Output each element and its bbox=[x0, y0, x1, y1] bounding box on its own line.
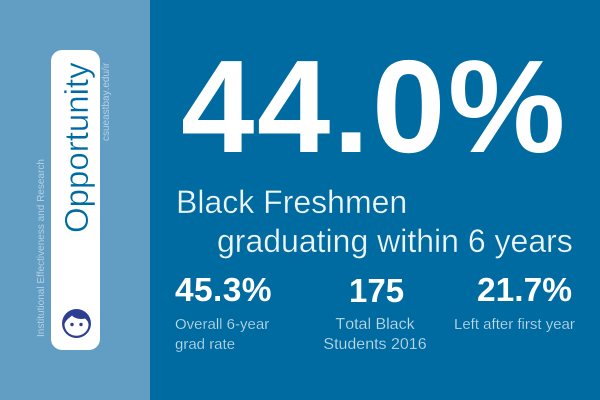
headline statistic: 44.0% bbox=[181, 33, 568, 180]
stat label: overall rate bbox=[175, 316, 269, 353]
stat label: total students bbox=[323, 316, 427, 353]
icon: student face bbox=[62, 309, 91, 338]
stat: total students: 175 bbox=[349, 272, 404, 309]
subheading line 2: graduating within 6 years bbox=[217, 223, 573, 259]
panel: sidebar bbox=[0, 0, 150, 400]
text: department name: Institutional Effectiveness and Research bbox=[36, 159, 47, 337]
stat label: overall rate: grad rate bbox=[175, 336, 235, 353]
stat: left after first year: 21.7% bbox=[477, 272, 572, 309]
heading: Opportunity: Opportunity bbox=[58, 62, 95, 233]
stat label: total students: Total Black bbox=[335, 316, 415, 333]
subheading line 1: Black Freshmen bbox=[176, 184, 407, 220]
stat label: total students: Students 2016 bbox=[323, 336, 427, 353]
text: website: csueastbay.edu/ir bbox=[101, 63, 112, 141]
stat: overall rate: 45.3% bbox=[175, 272, 272, 309]
vertical white label card bbox=[51, 50, 100, 350]
stat label: overall rate: Overall 6-year bbox=[175, 316, 269, 333]
stat label: left after first year: Left after first year bbox=[454, 316, 575, 333]
